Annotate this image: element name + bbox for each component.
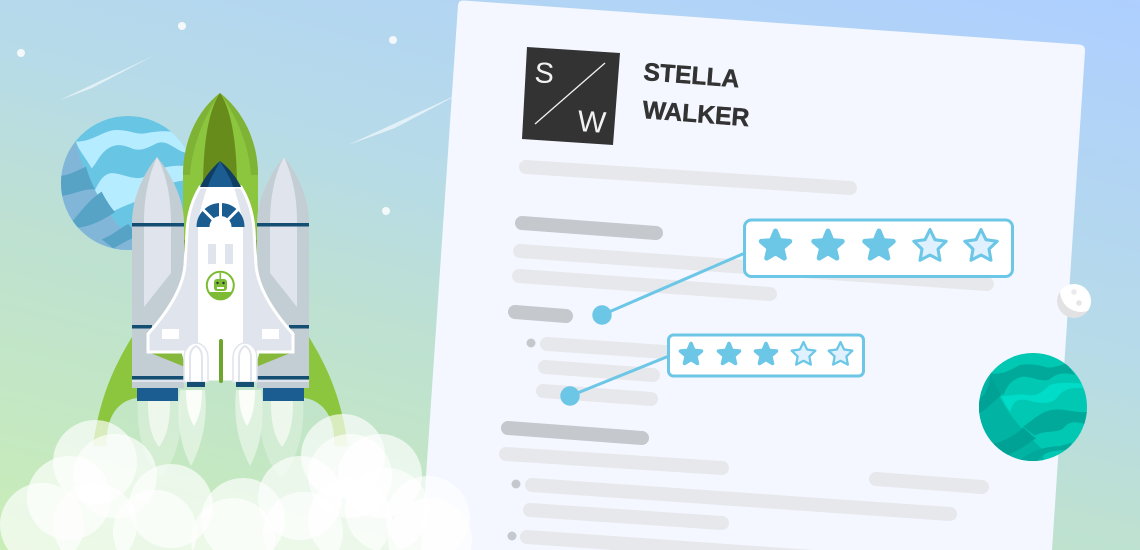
background stars xyxy=(17,22,397,215)
placeholder text lines xyxy=(506,167,987,523)
callout: star rating top xyxy=(744,220,1012,276)
connector: skills rating top xyxy=(592,253,745,325)
rocket fins xyxy=(93,337,348,446)
nose cone xyxy=(200,161,241,187)
badge: robot logo xyxy=(207,272,234,300)
connector: skills rating bottom xyxy=(560,356,669,406)
placeholder line cut by page edge xyxy=(520,530,814,550)
shooting streaks xyxy=(60,55,463,145)
booster left xyxy=(132,157,184,401)
logo: S/W monogram: S xyxy=(534,57,555,90)
engine pods xyxy=(184,343,257,387)
logo: S/W monogram xyxy=(522,47,620,145)
planet: blue xyxy=(61,116,186,250)
cockpit window xyxy=(202,202,239,227)
logo: S/W monogram: W xyxy=(577,105,608,140)
paper: resume xyxy=(421,0,1085,550)
bullets xyxy=(508,338,536,540)
flames xyxy=(138,390,303,478)
callout: star rating bottom xyxy=(668,335,864,376)
name: Stella Walker: STELLA xyxy=(643,58,740,93)
placeholder headings xyxy=(508,223,656,438)
booster right xyxy=(257,157,309,401)
smoke clouds xyxy=(0,414,472,550)
rocket xyxy=(93,93,348,478)
main fuel tank xyxy=(183,93,258,265)
shuttle body xyxy=(148,187,293,383)
name: Stella Walker xyxy=(642,58,750,132)
planet: teal xyxy=(979,353,1087,461)
moon xyxy=(1057,284,1091,318)
name: Stella Walker: WALKER xyxy=(642,96,750,132)
wing undersides xyxy=(148,352,293,369)
